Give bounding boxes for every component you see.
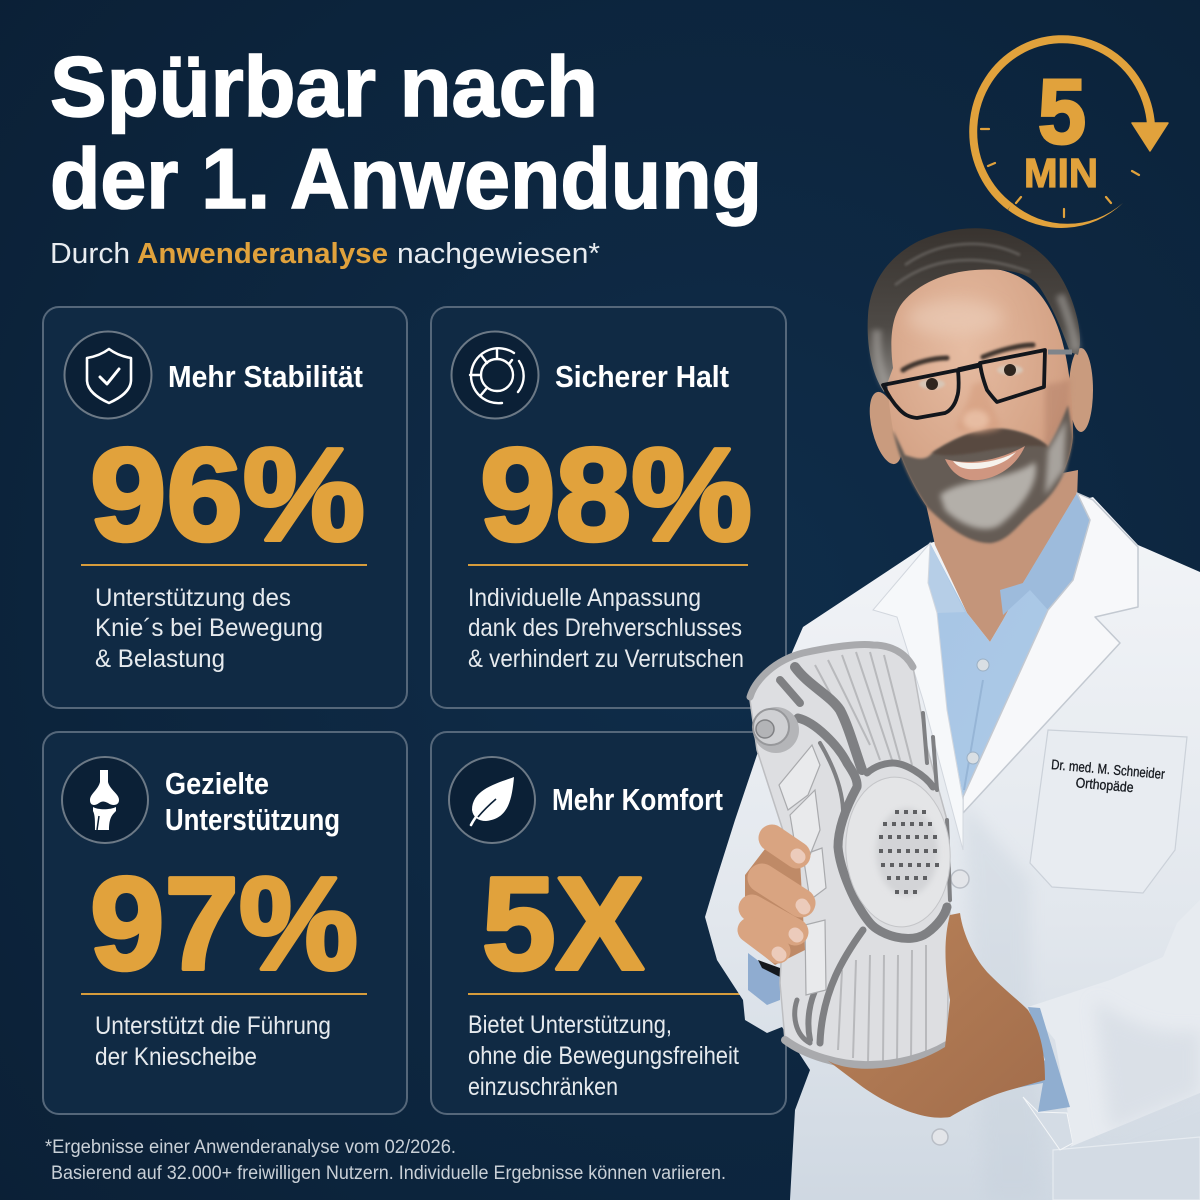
- brace rims: [750, 644, 947, 1065]
- body text: Unterstützt die Führung: [95, 1012, 331, 1040]
- nose: [956, 380, 1001, 433]
- right sleeve: [1023, 900, 1200, 1150]
- brace ribs: [815, 652, 926, 1062]
- body text: dank des Drehverschlusses: [468, 614, 742, 642]
- panel: Gezielte Unterstützung: [43, 732, 407, 1114]
- timer badge: 5 min: MIN: [1024, 150, 1098, 196]
- eyes: [919, 364, 1023, 390]
- shirt: [928, 493, 1090, 797]
- body text: Bietet Unterstützung,: [468, 1011, 672, 1039]
- divider: [81, 564, 367, 566]
- divider: [81, 993, 367, 995]
- left shirt cuff: [748, 953, 780, 1005]
- rotary dial: [753, 707, 799, 753]
- stat: 96%: 96%: [90, 421, 365, 568]
- lab coat: [705, 497, 1200, 1200]
- timer badge: 5 min: [973, 39, 1168, 228]
- body text: & Belastung: [95, 645, 225, 673]
- title: der 1. Anwendung: [50, 132, 762, 227]
- mouth: [945, 446, 1025, 480]
- stat: 98%: 98%: [480, 421, 752, 568]
- face: [886, 268, 1073, 542]
- icon: knee joint: [62, 757, 148, 843]
- body text: der Kniescheibe: [95, 1043, 257, 1071]
- hand: left fingers: [745, 838, 805, 965]
- hand: right: [827, 913, 1045, 1118]
- eyebrows: [903, 345, 1033, 370]
- patella pad: [840, 773, 956, 931]
- face shading: [907, 300, 1070, 450]
- body text: & verhindert zu Verrutschen: [468, 645, 744, 673]
- heading: Mehr Stabilität: [168, 359, 363, 394]
- breast pocket: [1030, 730, 1187, 893]
- name label: [1049, 756, 1166, 798]
- stat: 97%: 97%: [90, 850, 358, 997]
- subtitle: Durch: [50, 238, 130, 270]
- subtitle: Anwenderanalyse: [137, 238, 388, 270]
- body text: [95, 584, 323, 673]
- heading: Sicherer Halt: [555, 359, 729, 394]
- heading: Gezielte: [165, 766, 269, 801]
- body text: [468, 584, 744, 673]
- knee brace: [750, 644, 956, 1065]
- divider: [468, 993, 748, 995]
- name label: Dr. med. M. Schneider: [1051, 756, 1166, 782]
- icon: rotary dial: [452, 332, 538, 418]
- neck: [925, 470, 1078, 642]
- lacing panels: [779, 745, 826, 995]
- body text: Unterstützung des: [95, 584, 291, 612]
- subtitle: nachgewiesen*: [397, 238, 600, 270]
- hair: [868, 228, 1080, 392]
- panel: Sicherer Halt: [431, 307, 786, 708]
- glasses: [883, 350, 1072, 418]
- title: Spürbar nach: [50, 40, 598, 135]
- icon: shield with check: [64, 332, 152, 418]
- lower coat pocket: [1053, 1137, 1200, 1200]
- title: [50, 40, 762, 227]
- divider: [468, 564, 748, 566]
- ears: [863, 348, 1093, 467]
- heading: Mehr Komfort: [552, 782, 723, 817]
- icon: leaf: [449, 757, 535, 843]
- footnote: *Ergebnisse einer Anwenderanalyse vom 02/2026.: [45, 1137, 456, 1158]
- panel: Mehr Stabilität: [43, 307, 407, 708]
- beard: [893, 405, 1073, 543]
- right lapel: [963, 493, 1138, 813]
- body text: einzuschränken: [468, 1073, 618, 1101]
- doctor illustration: [705, 228, 1200, 1200]
- name label: Orthopäde: [1075, 774, 1134, 795]
- heading: [165, 766, 340, 837]
- body text: [95, 1012, 331, 1071]
- subtitle: [50, 238, 600, 270]
- body text: ohne die Bewegungsfreiheit: [468, 1042, 739, 1070]
- stat: 5X: 5X: [482, 850, 644, 997]
- footnote: [45, 1137, 726, 1184]
- perforated holes: [879, 810, 939, 894]
- heading: Unterstützung: [165, 802, 340, 837]
- brace grey pattern: [780, 667, 950, 1043]
- body text: [468, 1011, 739, 1101]
- left lapel: [873, 543, 963, 850]
- footnote: Basierend auf 32.000+ freiwilligen Nutzern. Individuelle Ergebnisse können variieren.: [51, 1163, 726, 1184]
- timer badge: 5 min: 5: [1038, 61, 1086, 163]
- panel: Mehr Komfort: [431, 732, 786, 1114]
- body text: Individuelle Anpassung: [468, 584, 701, 612]
- body text: Knie´s bei Bewegung: [95, 614, 323, 642]
- right shirt cuff: [1016, 1007, 1070, 1112]
- coat buttons: [932, 870, 969, 1145]
